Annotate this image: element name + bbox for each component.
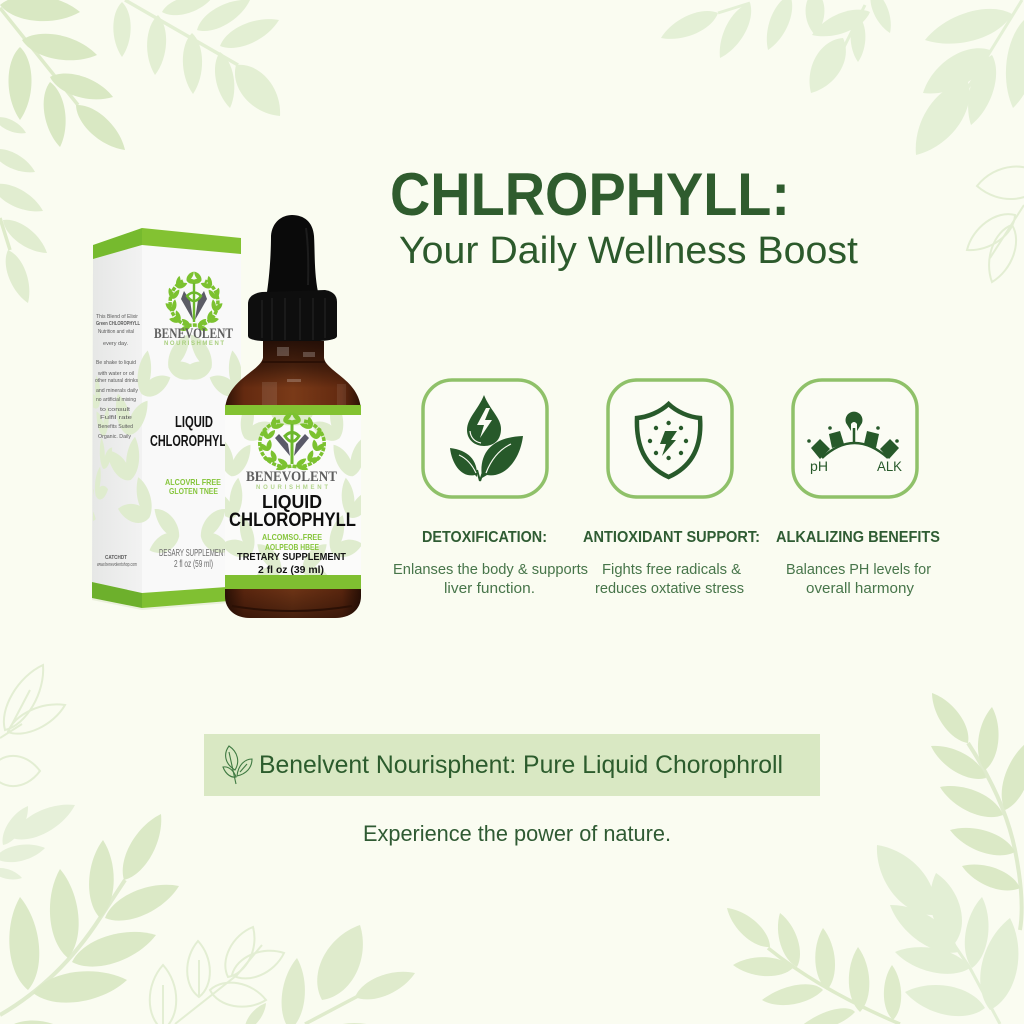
body: antioxidant: Fights free radicals & xyxy=(602,561,741,578)
box claims: ALCOVRL FREE xyxy=(165,477,221,487)
box side text: and minerals daily xyxy=(96,388,138,394)
box claims: GLOTEN TNEE xyxy=(169,486,218,496)
box side text: every day. xyxy=(103,341,128,347)
icon: pH gauge: ALK xyxy=(877,458,903,474)
body: detoxification: Enlanses the body & supports xyxy=(393,561,588,578)
body: detoxification: liver function. xyxy=(444,580,535,597)
collar ribs xyxy=(262,298,325,340)
bottle supplement facts: TRETARY SUPPLEMENT xyxy=(237,551,347,563)
box side text: www.benevolentshop.com xyxy=(96,562,137,568)
box supplement facts xyxy=(159,548,227,570)
bottle claims xyxy=(262,532,322,552)
bottle supplement facts: 2 fl oz (39 ml) xyxy=(258,564,324,576)
box side text xyxy=(95,314,140,568)
box side text: Green CHLOROPHYLL xyxy=(96,321,140,327)
foliage: left pale leaves xyxy=(0,795,80,883)
panel: alkalizing benefits xyxy=(776,380,940,597)
foliage: bottom left branch xyxy=(0,808,184,1024)
foliage: bottom right upper branch xyxy=(924,687,1024,930)
bottle supplement facts xyxy=(237,551,347,576)
icon frame: antioxidant xyxy=(608,380,732,497)
icon: pH gauge xyxy=(807,412,903,474)
box side text: Be shake to liquid xyxy=(96,360,136,366)
bottle logo xyxy=(257,411,327,472)
box side text: with water or oil xyxy=(97,371,134,377)
box claims xyxy=(165,477,221,496)
heading: antioxidant: ANTIOXIDANT SUPPORT: xyxy=(583,529,760,546)
bottle brand tagline: NOURISHMENT xyxy=(256,485,328,491)
icon: water drop and leaves xyxy=(450,395,523,481)
box side text: CATCHDT xyxy=(105,555,127,561)
box product name xyxy=(150,414,226,450)
foliage: bottom centre filled branch xyxy=(241,917,419,1024)
banner xyxy=(204,734,820,796)
subtitle: Your Daily Wellness Boost xyxy=(399,230,858,272)
box side text: no artificial mixing xyxy=(96,397,136,403)
glass highlights xyxy=(262,347,346,405)
foliage: top left branch xyxy=(0,0,132,306)
box supplement facts: DESARY SUPPLEMENT xyxy=(159,548,227,559)
box side text: Fulfil rate xyxy=(100,415,132,421)
box product name: CHLOROPHYL xyxy=(150,433,226,450)
dropper bulb xyxy=(267,215,318,292)
banner text: Benelvent Nourisphent: Pure Liquid Chorophroll xyxy=(259,751,783,779)
icon: shield xyxy=(637,404,700,477)
box supplement facts: 2 fl oz (59 ml) xyxy=(174,559,213,570)
panel: detoxification xyxy=(393,380,588,597)
box product name: LIQUID xyxy=(175,414,213,431)
body: antioxidant: reduces oxtative stress xyxy=(595,580,744,597)
body: antioxidant xyxy=(595,561,744,597)
icon: pH gauge: pH xyxy=(810,458,828,474)
panel: antioxidant support xyxy=(583,380,760,597)
box side text: other natural drinks xyxy=(95,378,138,384)
body: detoxification xyxy=(393,561,588,597)
icon: leaf sprig xyxy=(223,746,252,784)
dropper bottle xyxy=(225,215,361,618)
dropper collar xyxy=(248,290,337,341)
box wreath xyxy=(93,334,241,553)
box side text: This Blend of Elixir xyxy=(96,314,138,320)
heading: detoxification: DETOXIFICATION: xyxy=(422,529,547,546)
bottle glass xyxy=(225,341,361,618)
glass shading xyxy=(225,341,361,618)
bottle product name xyxy=(229,492,356,531)
bottle label xyxy=(225,405,361,589)
foliage: bottom right pale branch xyxy=(863,833,1024,1024)
bottle product name: LIQUID xyxy=(262,492,322,512)
foliage: right outline leaves xyxy=(960,164,1024,286)
box brand tagline: NOURISHMENT xyxy=(164,341,224,347)
product box xyxy=(92,228,241,610)
bottle product name: CHLOROPHYLL xyxy=(229,510,356,531)
box side text: to consult xyxy=(100,407,131,413)
body: alkalizing: overall harmony xyxy=(806,580,915,597)
box brand name: BENEVOLENT xyxy=(154,326,233,342)
bottle brand name: BENEVOLENT xyxy=(246,469,337,485)
bulb highlight xyxy=(306,228,308,285)
title: CHLROPHYLL: xyxy=(390,161,790,228)
foliage: bottom centre outline branch xyxy=(150,922,288,1024)
box side text: Nutrition and vital xyxy=(98,329,134,335)
icon frame: detox xyxy=(423,380,547,497)
foliage: bottom right lower branch xyxy=(721,901,902,1024)
box side text: Organic. Daily xyxy=(98,434,131,440)
icon frame: alkalizing xyxy=(793,380,917,497)
body: alkalizing xyxy=(786,561,931,597)
body: alkalizing: Balances PH levels for xyxy=(786,561,931,578)
foliage: top right branches xyxy=(657,0,1024,165)
bottle claims: AOLPEOB HBEE xyxy=(265,542,319,552)
bottle claims: ALCOMSO..FREE xyxy=(262,532,322,542)
foliage: top centre branch xyxy=(113,0,291,126)
tagline: Experience the power of nature. xyxy=(363,821,671,846)
heading: alkalizing: ALKALIZING BENEFITS xyxy=(776,529,940,546)
box logo xyxy=(164,270,224,333)
box side text: Benefits Suited xyxy=(98,424,133,430)
foliage: left outline leaves xyxy=(0,659,69,786)
